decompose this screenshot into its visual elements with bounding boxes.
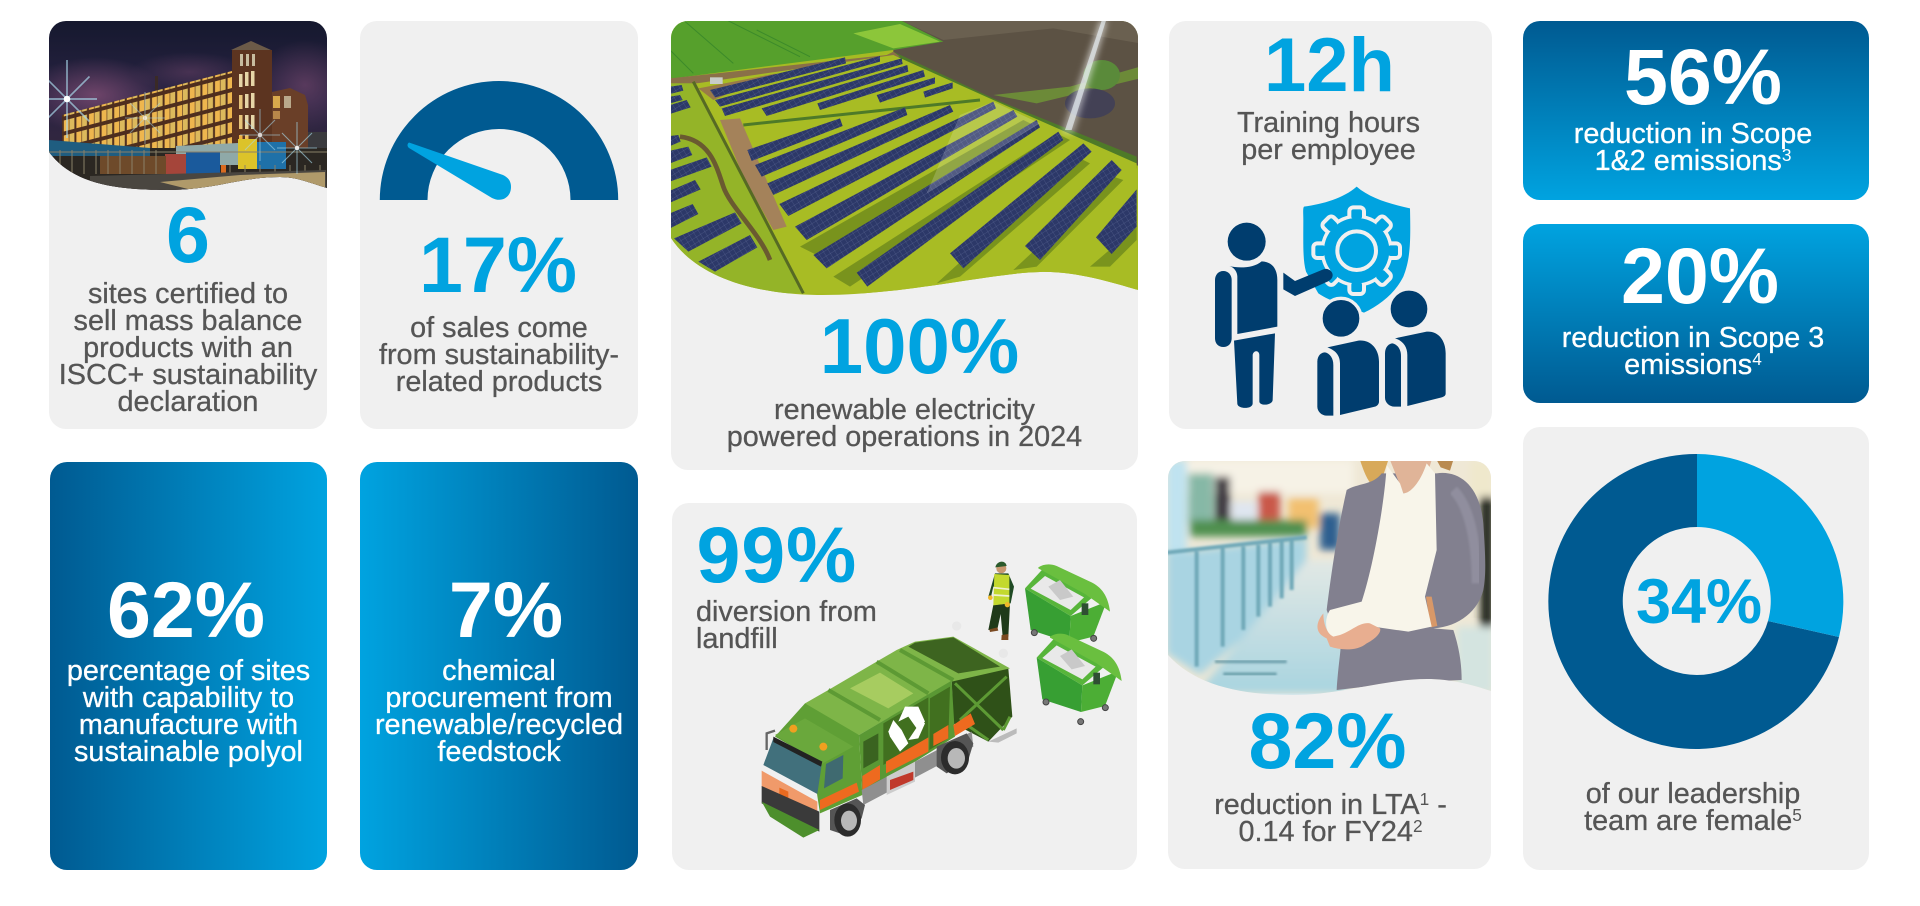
- donut remainder: [1548, 454, 1839, 749]
- body side: [859, 681, 955, 795]
- hand: [1317, 613, 1380, 649]
- recycling symbol: [888, 707, 925, 752]
- description: female leadership: team are female5: [1584, 805, 1802, 837]
- description: certified sites: sites certified to: [88, 278, 288, 310]
- brown fields: [893, 20, 1140, 167]
- icon: gear: [1313, 207, 1400, 294]
- icon: shield: [1303, 187, 1410, 313]
- description: scope 3 emissions: [1562, 322, 1824, 381]
- description: training hours: [1237, 107, 1420, 166]
- description: sales: related products: [396, 366, 602, 398]
- bare forearm: [1426, 597, 1437, 627]
- hedge: [890, 52, 1137, 168]
- description: landfill diversion: landfill: [696, 623, 778, 655]
- chassis: [862, 732, 973, 805]
- illustration: garbage truck, worker, bins: [762, 562, 1122, 838]
- photo: solar farm: [671, 21, 1138, 295]
- description: scope 1 and 2 emissions: reduction in Scope: [1574, 118, 1812, 150]
- big number: 82%: 82%: [1248, 696, 1407, 785]
- photo: factory at night: [49, 21, 327, 190]
- description: certified sites: ISCC+ sustainability: [59, 359, 317, 391]
- big number: 34%: 34%: [1636, 566, 1762, 636]
- green field: [670, 20, 943, 78]
- description: scope 1 and 2 emissions: 1&2 emissions3: [1595, 145, 1791, 177]
- description: renewable electricity: renewable electricity: [774, 394, 1035, 426]
- icon: worker: [988, 562, 1014, 640]
- big number: 7%: 7%: [449, 565, 563, 654]
- big number: 56%: 56%: [1624, 32, 1782, 121]
- description: polyol capability: [67, 655, 310, 768]
- big number: 100%: 100%: [820, 302, 1019, 390]
- big number: 20%: 20%: [1621, 231, 1779, 320]
- description: female leadership: of our leadership: [1586, 778, 1800, 810]
- description: scope 3 emissions: reduction in Scope 3: [1562, 322, 1824, 354]
- description: LTA reduction: 0.14 for FY242: [1238, 816, 1423, 848]
- icon: trainee right: [1385, 289, 1446, 407]
- description: polyol capability: sustainable polyol: [74, 736, 303, 768]
- description: chemical procurement: procurement from: [385, 682, 613, 714]
- icon: trainer, gear shield and trainees: [1215, 186, 1446, 416]
- description: female leadership: [1584, 778, 1802, 837]
- description: certified sites: products with an: [83, 332, 293, 364]
- big number: 99%: 99%: [696, 510, 857, 599]
- description: landfill diversion: diversion from: [696, 596, 877, 628]
- panel: 17% sales: [360, 21, 638, 429]
- neck: [1390, 460, 1432, 493]
- gauge needle: [408, 142, 511, 200]
- description: renewable electricity: powered operations in 2024: [727, 421, 1082, 453]
- solar panels: [670, 56, 1137, 287]
- sun glare: [927, 102, 1040, 193]
- panel: 62% polyol sites: [50, 462, 327, 870]
- sling: [1326, 463, 1437, 638]
- description: chemical procurement: renewable/recycled: [375, 709, 623, 741]
- panel: 100% renewable electricity: [671, 21, 1138, 470]
- photo: woman with arm in sling: [1168, 461, 1491, 695]
- description: renewable electricity: [727, 394, 1082, 453]
- icon: waste bins: [1025, 564, 1122, 725]
- orange stripes: [862, 765, 880, 790]
- description: polyol capability: manufacture with: [79, 709, 298, 741]
- description: sales: from sustainability-: [379, 339, 619, 371]
- panel: 7% feedstock: [360, 462, 638, 870]
- panel: 20% scope 3: [1523, 224, 1869, 403]
- hair: [1360, 461, 1388, 482]
- description: training hours: Training hours: [1237, 107, 1420, 139]
- icon: garbage truck: [762, 621, 1017, 838]
- big number: 62%: 62%: [107, 565, 265, 654]
- description: polyol capability: with capability to: [83, 682, 294, 714]
- description: LTA reduction: reduction in LTA1 -: [1214, 789, 1447, 821]
- gauge chart: [380, 81, 618, 200]
- donut chart: [1548, 454, 1844, 749]
- description: scope 3 emissions: emissions4: [1624, 349, 1762, 381]
- description: certified sites: declaration: [118, 386, 258, 418]
- big number: 6: 6: [166, 190, 210, 279]
- description: sales: [379, 312, 619, 398]
- shirt: [1327, 473, 1485, 690]
- wheels: [830, 798, 865, 833]
- panel: 56% scope 1 and 2: [1523, 21, 1869, 200]
- description: LTA reduction: [1214, 789, 1447, 848]
- gauge arc: [380, 81, 618, 200]
- description: polyol capability: percentage of sites: [67, 655, 310, 687]
- description: chemical procurement: chemical: [442, 655, 556, 687]
- description: certified sites: sell mass balance: [74, 305, 302, 337]
- description: chemical procurement: feedstock: [437, 736, 561, 768]
- panel: 82% LTA reduction: [1168, 461, 1491, 869]
- panel: 12h training: [1169, 21, 1492, 429]
- icon: trainer: [1215, 223, 1333, 408]
- panel: 99% landfill diversion: [672, 503, 1137, 870]
- rear hopper: [952, 668, 1012, 742]
- description: training hours: per employee: [1241, 134, 1416, 166]
- cab: [775, 703, 862, 813]
- panel: 34% female leadership: [1523, 427, 1869, 870]
- big number: 17%: 17%: [419, 220, 577, 309]
- ground: [697, 55, 1137, 293]
- body top: [805, 637, 1010, 735]
- panel: 6 certified sites: [49, 21, 327, 429]
- icon: trainee left: [1317, 298, 1379, 416]
- description: chemical procurement: [375, 655, 623, 768]
- description: scope 1 and 2 emissions: [1574, 118, 1812, 177]
- description: sales: of sales come: [410, 312, 588, 344]
- big number: 12h: 12h: [1264, 23, 1395, 108]
- description: certified sites: [59, 278, 318, 418]
- description: landfill diversion: [696, 596, 877, 655]
- donut slice: [1697, 454, 1843, 637]
